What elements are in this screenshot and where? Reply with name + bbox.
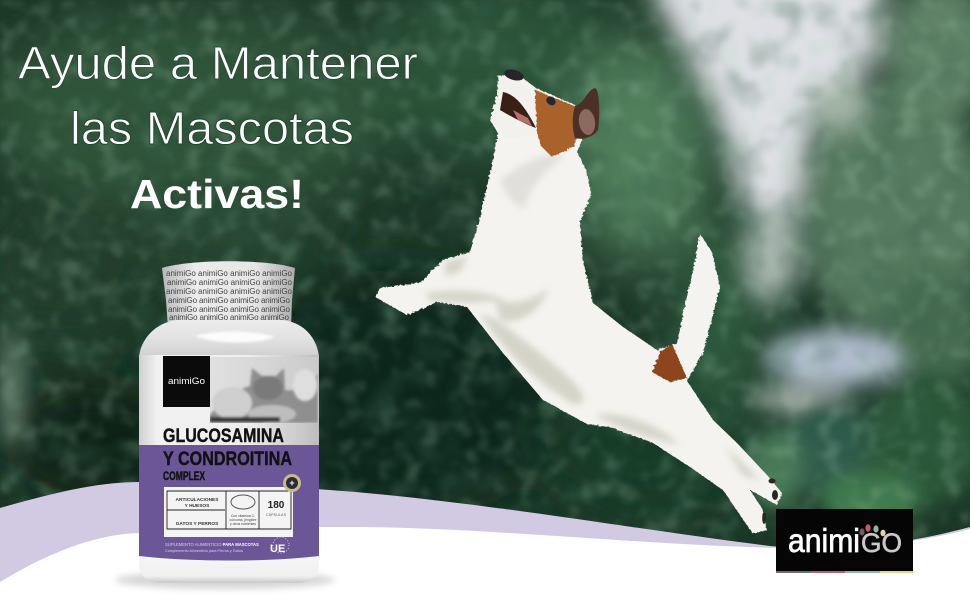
logo stripes <box>776 571 913 573</box>
inner ear <box>577 108 597 136</box>
jar shoulder <box>139 320 319 358</box>
jar base <box>139 555 319 583</box>
product name <box>163 426 292 483</box>
body shading <box>425 256 760 480</box>
supplement caption <box>165 542 259 553</box>
white info stamp: 180 <box>268 500 285 511</box>
EU mark: UE <box>270 543 285 555</box>
gold badge: + <box>289 478 295 488</box>
white info stamp: Y HUESOS <box>185 503 210 509</box>
white info stamp: y otros nutrientes <box>230 522 256 526</box>
jar shadow <box>115 571 335 589</box>
logo wordmark: animi <box>788 522 860 559</box>
logo wordmark end: GO <box>861 528 902 558</box>
label photo of puppy and kitten <box>205 357 318 423</box>
white info stamp: Con vitamina C, <box>231 514 255 518</box>
lavender wave <box>0 482 970 600</box>
supplement caption: SUPLEMENTO ALIMENTICIO PARA MASCOTAS <box>165 542 259 547</box>
supplement caption: Complemento Alimenticio para Perros y Gatos <box>165 549 243 553</box>
white info stamp: GATOS Y PERROS <box>176 521 219 527</box>
EU mark <box>270 537 289 555</box>
nose <box>503 68 525 82</box>
product name: GLUCOSAMINA <box>163 426 284 447</box>
lid pattern text: animiGo animiGo animiGo animiGo <box>168 296 291 305</box>
product name: Y CONDROITINA <box>163 449 292 470</box>
lid pattern text: animiGo animiGo animiGo animiGo <box>166 287 293 296</box>
lid pattern text: animiGo animiGo animiGo animiGo <box>166 269 293 278</box>
white info stamp: cúrcuma, jengibre <box>230 518 257 522</box>
headline <box>18 37 418 217</box>
toes <box>762 478 778 524</box>
white info stamp <box>164 487 293 537</box>
jar wrap lid <box>162 261 295 328</box>
tan head patch <box>535 90 580 157</box>
white info stamp: CÁPSULAS <box>266 513 287 517</box>
headline line 2: las Mascotas <box>70 102 354 154</box>
eye <box>545 95 557 107</box>
shoulder highlight <box>195 332 275 343</box>
label logo square: animiGo <box>168 376 205 387</box>
product name: COMPLEX <box>163 469 205 483</box>
white info stamp: ARTICULACIONES <box>176 497 219 503</box>
white muzzle <box>490 76 537 138</box>
jar body <box>139 355 319 560</box>
lid pattern text: animiGo animiGo animiGo animiGo <box>169 313 290 322</box>
mouth <box>500 92 536 128</box>
chest shadow <box>500 154 565 210</box>
lid pattern text <box>166 269 293 322</box>
jumping dog <box>375 68 782 534</box>
purple label band <box>139 445 319 560</box>
lid pattern text: animiGo animiGo animiGo animiGo <box>167 278 293 287</box>
headline line 1: Ayude a Mantener <box>18 37 418 89</box>
lid pattern text: animiGo animiGo animiGo animiGo <box>168 305 291 314</box>
logo paw <box>859 524 886 536</box>
label logo square <box>163 356 210 407</box>
headline line 3: Activas! <box>130 171 304 217</box>
gold badge <box>283 474 301 492</box>
dog body <box>375 74 782 534</box>
ear <box>573 88 599 139</box>
tan tail patch <box>652 344 687 382</box>
tongue <box>513 110 532 126</box>
animigo logo <box>776 509 913 573</box>
product jar <box>139 261 319 583</box>
white wave <box>0 527 970 600</box>
